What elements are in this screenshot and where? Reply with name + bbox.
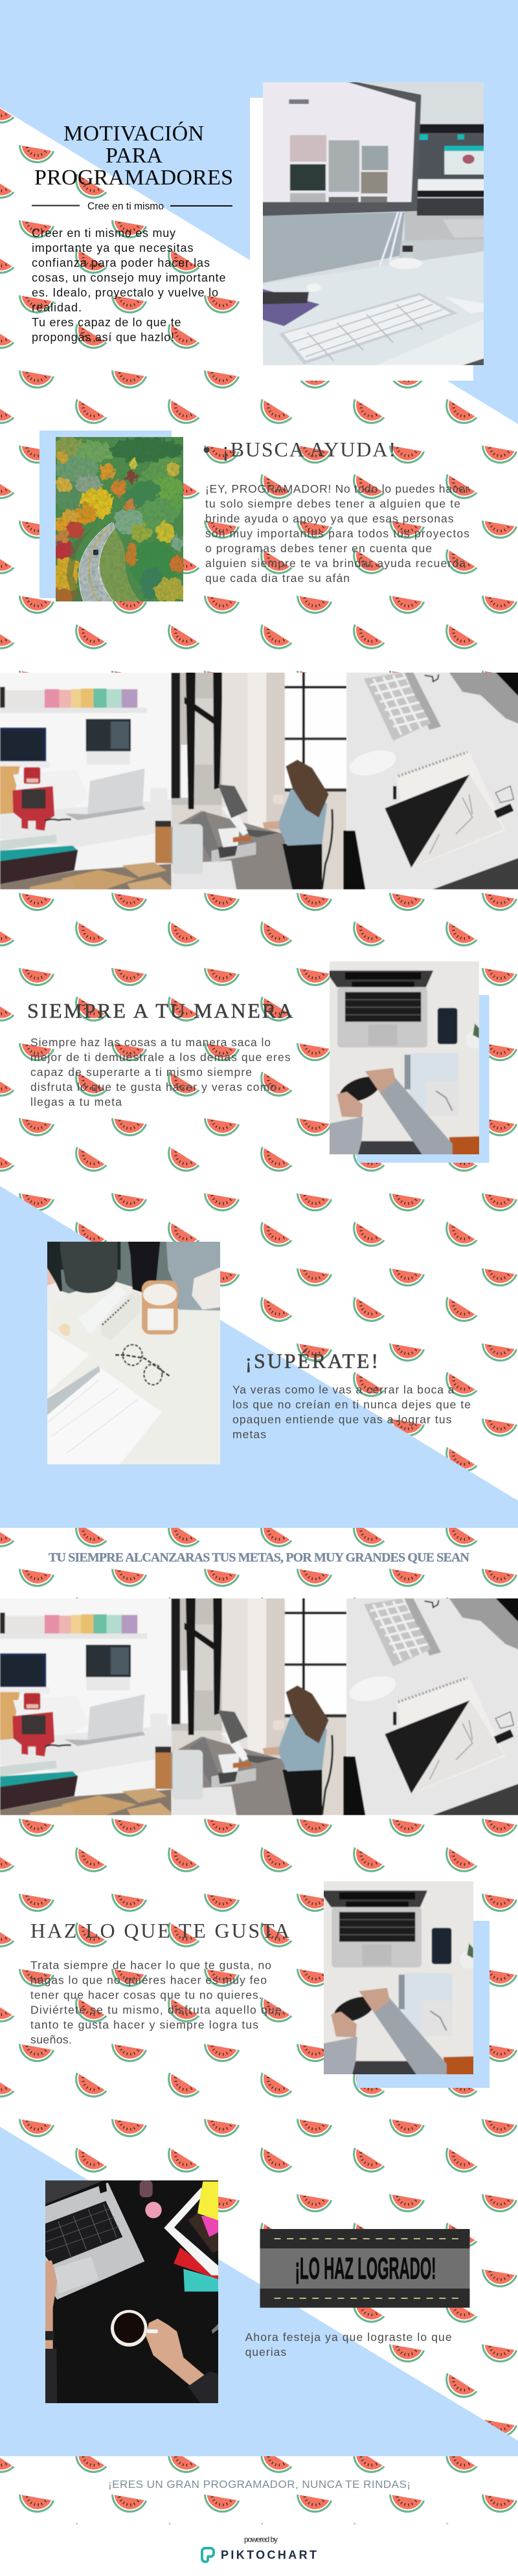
- text block: intro: confianza para poder hacer las: [32, 256, 210, 269]
- text block: busca ayuda: que cada dia trae su afán: [205, 572, 350, 585]
- text block: siempre a tu manera: disfruta lo que te gusta hacer y veras como: [30, 1081, 276, 1093]
- text block: haz lo que te gusta: tener que hacer cosas que tu no quieres.: [30, 1989, 262, 2002]
- blue diagonal: superate: [0, 1186, 518, 1528]
- text block: intro: propongás así que hazlo!: [32, 331, 174, 344]
- text block: intro: [32, 227, 225, 344]
- text block: siempre a tu manera: llegas a tu meta: [30, 1095, 122, 1108]
- photo strip: office triptych repeated: [0, 1591, 518, 1822]
- text block: superate: Ya veras como le vas a cerrar la boca a: [232, 1383, 455, 1396]
- text block: intro: importante ya que necesitas: [32, 241, 193, 254]
- footer: white band: [0, 2524, 518, 2576]
- text block: haz lo que te gusta: sueños.: [30, 2033, 72, 2046]
- text block: superate: los que no creían en ti nunca dejes que te: [232, 1398, 471, 1411]
- photo: dark desk with laptop and coffee: [45, 2180, 218, 2403]
- text block: busca ayuda: o programas debes tener en cuenta que: [205, 542, 432, 555]
- text block: intro: realidad.: [32, 301, 82, 314]
- footer: piktochart credit: powered by: [244, 2535, 278, 2544]
- panel: blue frame behind forest photo: [39, 431, 172, 598]
- banner: lo haz logrado: [260, 2229, 470, 2308]
- text block: siempre a tu manera: capaz de superarte a ti mismo siempre: [30, 1066, 252, 1079]
- title: MOTIVACIÓN: [63, 121, 204, 146]
- heading: busca ayuda: ¡BUSCA AYUDA!: [222, 438, 396, 461]
- text block: haz lo que te gusta: Diviértete se tu mismo, disfruta aquello que: [30, 2003, 282, 2016]
- closing line: ¡ERES UN GRAN PROGRAMADOR, NUNCA TE RINDAS¡: [108, 2478, 411, 2491]
- text block: busca ayuda: alguien siempre te va brindar ayuda recuerda: [205, 557, 466, 570]
- photo: forest road: [56, 437, 183, 601]
- text block: busca ayuda: tu solo siempre debes tener a alguien que te: [205, 497, 460, 510]
- text block: superate: metas: [232, 1428, 266, 1441]
- panel: header photo frame: [250, 98, 473, 381]
- text block: logrado: Ahora festeja ya que lograste lo que: [245, 2331, 452, 2344]
- photo: desktop monitor and keyboard: [263, 82, 484, 365]
- banner text: metas: TU SIEMPRE ALCANZARAS TUS METAS, POR MUY GRANDES QUE SEAN: [49, 1551, 470, 1565]
- text block: logrado: [245, 2331, 452, 2358]
- title: PROGRAMADORES: [34, 166, 233, 190]
- text block: siempre a tu manera: [30, 1036, 291, 1108]
- text block: busca ayuda: ¡EY, PROGRAMADOR! No todo lo puedes hacer: [205, 482, 469, 495]
- heading: superate: ¡SUPÉRATE!: [245, 1349, 378, 1372]
- photo: laptop and hands: [324, 952, 486, 1163]
- text block: intro: Creer en ti mismo es muy: [32, 227, 175, 240]
- photo: candle and glasses: [47, 1242, 220, 1464]
- text block: siempre a tu manera: mejor de ti demuéstrale a los demás que eres: [30, 1051, 291, 1064]
- text block: busca ayuda: son muy importantes para todos tus proyectos: [205, 527, 469, 540]
- photo strip: office triptych: [0, 666, 518, 897]
- text block: haz lo que te gusta: tanto te gusta hacer y siempre logra tus: [30, 2019, 258, 2032]
- footer: piktochart credit: PIKTOCHART: [221, 2549, 317, 2562]
- text block: haz lo que te gusta: hagas lo que no quieres hacer es muy feo: [30, 1974, 267, 1987]
- text block: intro: es. Idealo, proyectalo y vuelve lo: [32, 286, 218, 299]
- pattern: watermelons section 3: [0, 1815, 518, 2524]
- heading: siempre a tu manera: SIEMPRE A TU MANERA: [27, 999, 293, 1022]
- text block: haz lo que te gusta: [30, 1959, 282, 2046]
- text block: busca ayuda: brinde ayuda o apoyo ya que esas personas: [205, 512, 454, 525]
- title: PARA: [106, 144, 163, 168]
- subtitle with rules: Cree en ti mismo: [87, 201, 164, 212]
- heading: haz lo que te gusta: HAZ LO QUE TE GUSTA: [30, 1919, 289, 1942]
- pattern: watermelons section 1: [0, 0, 518, 673]
- text block: siempre a tu manera: Siempre haz las cosas a tu manera saca lo: [30, 1036, 271, 1049]
- text block: superate: opaquen entiende que vas a lograr tus: [232, 1413, 452, 1426]
- panel: blue frame behind laptop photo: [357, 995, 490, 1163]
- text block: intro: cosas, un consejo muy importante: [32, 271, 225, 284]
- text block: haz lo que te gusta: Trata siempre de hacer lo que te gusta, no: [30, 1959, 271, 1972]
- text block: superate: [232, 1383, 471, 1441]
- title: [34, 121, 233, 190]
- pattern: watermelons section 2: [0, 889, 518, 1598]
- panel: blue frame behind second laptop photo: [357, 1921, 490, 2088]
- text block: logrado: querias: [245, 2346, 286, 2358]
- text block: intro: Tu eres capaz de lo que te: [32, 316, 181, 329]
- photo: laptop and hands repeated: [318, 1872, 480, 2083]
- footer: piktochart credit: [202, 2535, 317, 2562]
- blue diagonal: header: [0, 0, 518, 424]
- text block: busca ayuda: [205, 482, 469, 585]
- blue diagonal: logrado: [0, 2127, 518, 2456]
